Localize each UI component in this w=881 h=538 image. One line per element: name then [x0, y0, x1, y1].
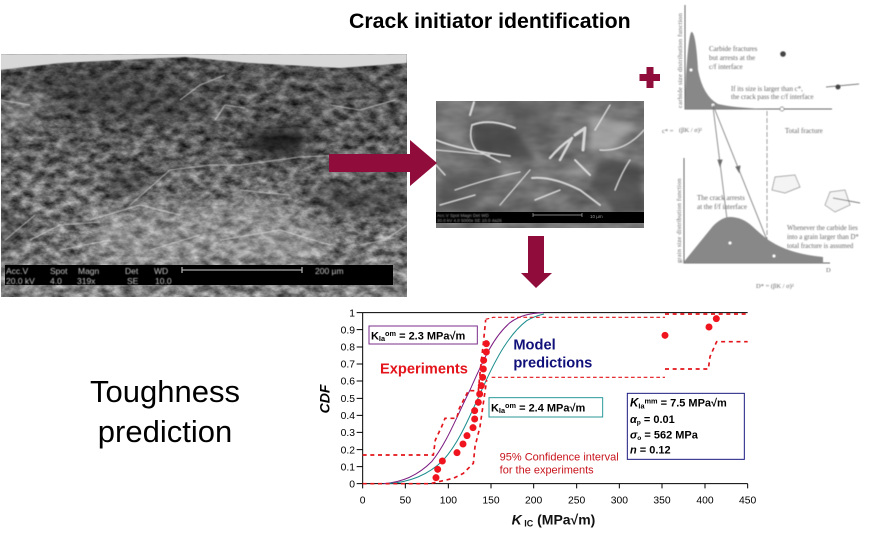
- arrow: right: [329, 140, 437, 186]
- carbide size distribution plot: carbide size distribution function: [677, 13, 684, 108]
- callout: purple model value: K: [371, 330, 379, 342]
- experimental data points: [432, 315, 720, 481]
- x axis labels: 250: [568, 496, 586, 507]
- carbide size distribution plot: the crack pass the c/f interface: [731, 94, 813, 101]
- heading: toughness prediction: prediction: [98, 414, 232, 449]
- chart: CDF of KIC: [317, 308, 757, 528]
- grain size distribution plot: The crack arrests: [697, 194, 745, 202]
- label: confidence interval: 95% Confidence interval: [500, 452, 619, 464]
- lower confidence bound: [363, 342, 748, 484]
- carbide size distribution plot: but arrests at the: [709, 54, 755, 62]
- scale bar strip: 200 µm: [315, 266, 344, 276]
- grain size distribution plot: D* = (βK / σ)²: [756, 283, 794, 290]
- y axis labels: 0.7: [341, 360, 355, 371]
- y axis labels: 0.3: [341, 428, 355, 439]
- y axis labels: 0.6: [341, 377, 355, 388]
- y axis labels: 0.8: [341, 343, 355, 354]
- scale bar strip: Magn: [78, 266, 100, 276]
- callout: model parameters: [627, 393, 744, 459]
- grain size distribution plot: grain size distribution function: [676, 178, 683, 263]
- x axis labels: 150: [482, 496, 500, 507]
- scale bar strip: 20.0 kV: [6, 276, 35, 286]
- callout: model parameters: σ: [630, 429, 638, 441]
- bright top edge of the specimen: [0, 54, 407, 70]
- scale bar strip: 20.0 kV 4.0 5000x SE 10.0 4a26: [437, 218, 502, 223]
- upper confidence bound: [363, 314, 748, 455]
- label: confidence interval: for the experiments: [500, 464, 594, 476]
- y axis labels: 0.5: [341, 394, 355, 405]
- y axis labels: 0.9: [341, 325, 355, 336]
- callout: teal model value: om: [505, 401, 517, 410]
- grain size distribution plot: D: [826, 267, 831, 274]
- callout: purple model value: = 2.3 MPa√m: [396, 330, 466, 342]
- label: model predictions: predictions: [513, 356, 592, 372]
- callout: model parameters: n = 0.12: [630, 445, 671, 457]
- scale bar strip: Acc.V: [6, 266, 29, 276]
- carbide size distribution plot: (βK / σ)²: [679, 127, 702, 134]
- callout: teal model value: K: [491, 402, 499, 414]
- x axis title: (MPa√m): [533, 512, 595, 528]
- callout: model parameters: = 0.01: [641, 414, 675, 426]
- x axis labels: [360, 496, 757, 507]
- carbide size distribution plot: If its size is larger than c*,: [731, 86, 803, 93]
- y axis labels: 0.2: [341, 445, 355, 456]
- grain size distribution plot: at the f/f interface: [697, 203, 747, 211]
- carbide size distribution plot: c* =: [662, 128, 674, 135]
- scale bar strip: 10 µm: [590, 214, 603, 219]
- scale bar strip: Acc.V Spot Magn Det WD: [437, 213, 490, 218]
- carbide size distribution plot: Carbide fractures: [709, 45, 758, 53]
- scale bar strip: 10.0: [155, 276, 172, 286]
- carbide size distribution plot: [662, 5, 859, 135]
- icon: plus: [640, 67, 660, 88]
- label: model predictions: Model: [513, 337, 556, 353]
- x axis labels: 100: [440, 496, 457, 507]
- x axis labels: 350: [653, 496, 671, 507]
- x axis labels: 50: [400, 496, 411, 507]
- scale bar strip: Spot: [50, 266, 68, 276]
- callout: model parameters: = 562 MPa: [641, 429, 699, 441]
- callout: purple model value: om: [385, 329, 397, 338]
- arrow: down: [521, 236, 552, 288]
- callout: model parameters: mm: [645, 396, 658, 405]
- axes: [357, 313, 748, 488]
- carbide size distribution plot: c/f interface: [709, 63, 743, 71]
- x axis title: IC: [522, 518, 534, 528]
- micrograph: crack initiator close-up: [436, 101, 644, 228]
- heading: toughness prediction: Toughness: [90, 374, 240, 409]
- x axis labels: 400: [696, 496, 714, 507]
- grain size distribution plot: total fracture is assumed: [787, 243, 854, 250]
- carbide size distribution plot: Total fracture: [785, 127, 823, 135]
- micrograph: fracture surface: [0, 54, 407, 297]
- scanned diagram: carbide and grain size distributions: [662, 5, 860, 290]
- callout: model parameters: α: [630, 414, 638, 426]
- scale bar strip: WD: [154, 266, 168, 276]
- y axis labels: [341, 308, 355, 490]
- callout: teal model value: [489, 398, 603, 417]
- y axis labels: 0.1: [341, 462, 355, 473]
- scale bar strip: Det: [125, 266, 139, 276]
- callout: model parameters: o: [637, 435, 641, 442]
- callout: teal model value: = 2.4 MPa√m: [516, 402, 586, 414]
- x axis title: K: [512, 512, 523, 528]
- callout: purple model value: [369, 326, 477, 344]
- y axis labels: 1: [349, 308, 355, 319]
- callout: model parameters: K: [630, 397, 640, 410]
- scale bar strip: 4.0: [50, 276, 62, 286]
- callout: purple model value: Ia: [379, 334, 386, 343]
- scale bar strip: [436, 212, 644, 223]
- callout: model parameters: = 7.5 MPa√m: [658, 398, 727, 410]
- callout: teal model value: Ia: [499, 406, 506, 415]
- scale bar strip: [5, 265, 393, 286]
- y axis title: CDF: [317, 384, 333, 413]
- model curve: purple: [383, 313, 543, 484]
- y axis labels: 0: [349, 479, 355, 490]
- callout: model parameters: p: [637, 420, 641, 427]
- x axis labels: 300: [611, 496, 628, 507]
- grain size distribution plot: [676, 158, 860, 290]
- grain size distribution plot: Whenever the carbide lies: [787, 225, 858, 232]
- callout: model parameters: Ia: [638, 401, 645, 410]
- y axis labels: 0.4: [341, 411, 355, 422]
- scale bar strip: 319x: [77, 276, 96, 286]
- title: Crack initiator identification: [349, 9, 631, 33]
- x axis labels: 0: [360, 496, 366, 507]
- model curve: teal: [387, 314, 544, 484]
- grain size distribution plot: into a grain larger than D*: [787, 234, 859, 241]
- x axis labels: 450: [739, 496, 757, 507]
- x axis labels: 200: [525, 496, 543, 507]
- crack path lines: [713, 105, 767, 262]
- label: experiments: Experiments: [380, 361, 468, 377]
- scale bar strip: SE: [127, 276, 139, 286]
